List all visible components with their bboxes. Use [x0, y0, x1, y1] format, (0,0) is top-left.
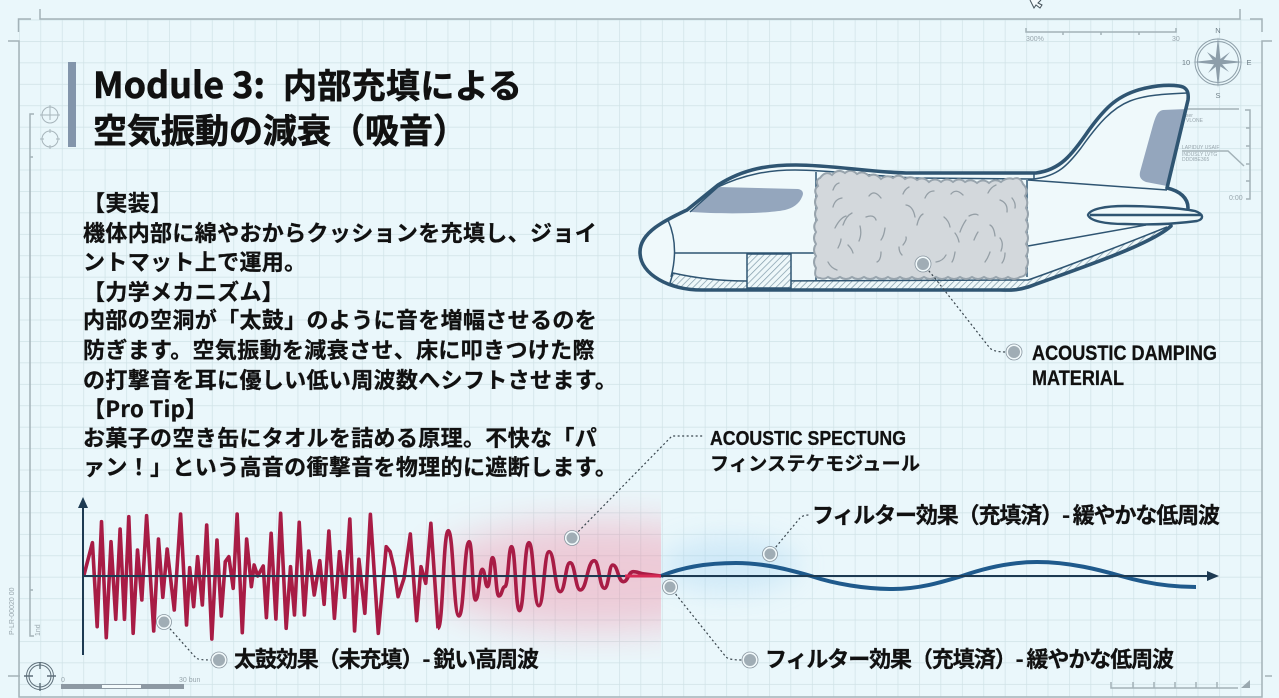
waveform chart [78, 497, 1219, 655]
wing [1088, 206, 1202, 224]
foam curls [828, 183, 1015, 270]
axes [78, 497, 1219, 655]
bottom-left scale bar [61, 677, 201, 689]
bottom-right ruler [1111, 680, 1250, 688]
callout: acoustic spectung: フィンステケモジュール [710, 449, 920, 476]
heading: implementation: 【実装】 [83, 186, 172, 218]
hatched support block [747, 254, 791, 288]
text block: mechanics: の打撃音を耳に優しい低い周波数へシフトさせます。 [83, 363, 617, 395]
callout: filter effect lower [662, 580, 1174, 674]
text block: mechanics [83, 303, 617, 395]
damping material foam [814, 171, 1028, 279]
compass: N [1215, 26, 1221, 35]
callout: acoustic damping material [915, 256, 1217, 390]
callout: filter effect upper [762, 498, 1220, 562]
fuselage body [640, 85, 1202, 290]
vertical margin notes: 1nd [35, 624, 42, 636]
airplane cross-section [640, 85, 1202, 290]
title: 空気振動の減衰（吸音） [93, 104, 467, 153]
red glow [430, 521, 770, 631]
red tail over axis [625, 574, 661, 578]
text block: mechanics: 内部の空洞が「太鼓」のように音を増幅させるのを [83, 303, 597, 335]
cursor icon [1030, 0, 1042, 8]
fuselage outline [640, 85, 1188, 290]
heading: pro tip: 【Pro Tip】 [83, 392, 208, 424]
heading: mechanics: 【力学メカニズム】 [83, 275, 284, 307]
technical annotations: 0:00 [1229, 195, 1243, 202]
callout: acoustic spectung: ACOUSTIC SPECTUNG [710, 428, 906, 450]
compass: E [1246, 58, 1252, 67]
technical annotations: LAPIDUY USAIF [1182, 145, 1219, 151]
title: 内部充填による [283, 59, 522, 108]
technical annotations: VLONE [1186, 118, 1204, 124]
interior lines [668, 93, 1187, 280]
callout: drum effect [156, 614, 539, 674]
vertical margin notes: P-LR-00020 00 [9, 587, 16, 635]
body text [83, 186, 617, 482]
top scale ruler: 30 [1172, 36, 1180, 43]
top scale ruler: 300% [1026, 36, 1044, 43]
text block: implementation: 機体内部に綿やおからクッションを充填し、ジョイ [83, 216, 597, 248]
blue glow [660, 537, 800, 593]
technical annotations: ser [1186, 113, 1193, 119]
callout: acoustic damping material: ACOUSTIC DAMPING [1032, 342, 1217, 365]
cockpit window [691, 187, 803, 213]
text block: pro tip: お菓子の空き缶にタオルを詰める原理。不快な「パ [83, 421, 597, 453]
callout: drum effect: 太鼓効果（未充填）- 鋭い高周波 [234, 642, 539, 674]
floor hatching [670, 227, 1167, 290]
text block: mechanics: 防ぎます。空気振動を減衰させ、床に叩きつけた際 [83, 333, 595, 365]
red high-frequency wave [84, 513, 661, 639]
tail fin panel [1140, 109, 1186, 186]
text block: implementation: ントマット上で運用。 [83, 245, 307, 277]
top scale ruler [1026, 28, 1180, 43]
text block: pro tip: ァン！」という高音の衝撃音を物理的に遮断します。 [83, 450, 617, 482]
bottom-left target icon [24, 662, 56, 691]
title accent bar [68, 62, 76, 147]
text block: implementation [83, 216, 597, 277]
title: Module 3: [93, 57, 265, 109]
technical annotations [1182, 109, 1250, 202]
technical annotations: DDDIBE365 [1182, 157, 1209, 163]
callout: acoustic damping material: MATERIAL [1032, 367, 1124, 390]
callout: filter effect lower: フィルター効果（充填済）- 緩やかな低周波 [765, 642, 1174, 674]
blue low-frequency wave [661, 562, 1196, 589]
title [93, 57, 522, 153]
compass: 10 [1182, 58, 1190, 67]
bottom-left scale bar: 0 [61, 677, 65, 684]
crosshair icons [40, 105, 60, 149]
bottom-left scale bar: 30 bun [179, 677, 201, 684]
text block: pro tip [83, 421, 617, 482]
callout: acoustic spectung [564, 428, 920, 546]
callout: filter effect upper: フィルター効果（充填済）- 緩やかな低周波 [812, 498, 1220, 530]
vertical margin notes [9, 587, 42, 636]
compass: S [1215, 91, 1221, 100]
technical annotations: INDUSLY LVTG [1182, 152, 1217, 158]
compass [1182, 26, 1252, 100]
